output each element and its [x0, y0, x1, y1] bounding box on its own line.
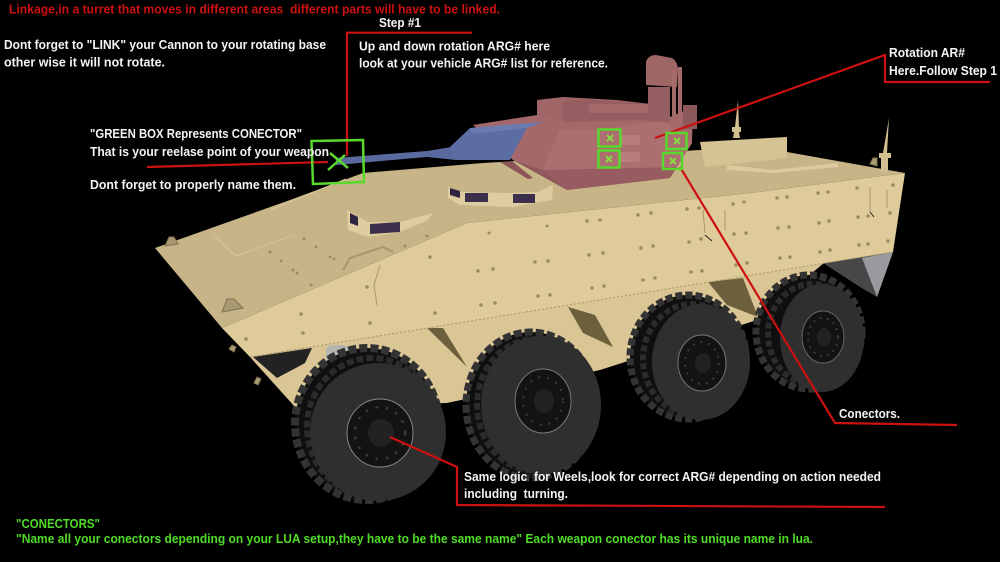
antennas — [732, 100, 891, 172]
rivets — [244, 183, 895, 341]
deck panel lines — [214, 179, 346, 256]
label: conectors: Conectors. — [839, 406, 900, 421]
cupola hatch two — [347, 210, 433, 237]
note: rotation arg — [889, 45, 997, 78]
side hatch lines — [374, 187, 887, 305]
second wheel — [466, 332, 601, 478]
footer note — [16, 516, 813, 546]
note: wheels — [464, 469, 881, 501]
hull handle — [343, 247, 393, 270]
cupola hatch one — [448, 185, 553, 207]
top deck — [155, 150, 905, 328]
vehicle illustration — [155, 55, 905, 501]
note: rotation arg: Rotation AR# — [889, 45, 966, 60]
lower hull — [250, 252, 893, 407]
hatch handles — [705, 212, 874, 241]
note: green box: That is your reelase point of your weapon — [90, 144, 329, 159]
lifting lugs — [165, 158, 877, 385]
cannon barrel — [336, 147, 456, 165]
note: up and down rotation — [359, 38, 608, 70]
green x markers — [606, 135, 680, 164]
footer note: "Name all your conectors depending on your LUA setup,they have to be the same name" Each weapon conector has its unique name in lua. — [16, 531, 813, 546]
side seam — [250, 252, 893, 357]
gun mantlet — [450, 122, 543, 160]
rear wheel — [756, 275, 864, 392]
note: wheels: Same logic for Weels,look for correct ARG# depending on action needed — [464, 469, 881, 484]
note: green box — [90, 126, 329, 192]
note: green box: Dont forget to properly name them. — [90, 177, 296, 192]
note: link cannon: other wise it will not rotate. — [4, 54, 165, 70]
third wheel — [630, 295, 750, 420]
hull side — [222, 173, 905, 357]
note: link cannon — [4, 37, 326, 70]
title: Linkage,in a turret that moves in different areas different parts will have to be linked. — [9, 2, 500, 16]
red leader lines — [147, 33, 990, 507]
note: up and down rotation: Up and down rotation ARG# here — [359, 38, 550, 54]
turret — [473, 55, 697, 190]
note: up and down rotation: look at your vehicle ARG# list for reference. — [359, 56, 608, 70]
turret strut — [500, 161, 533, 179]
rear deck box — [700, 137, 838, 173]
note: wheels: including turning. — [464, 486, 568, 501]
step label: Step #1 — [379, 15, 421, 30]
note: link cannon: Dont forget to "LINK" your Cannon to your rotating base — [4, 37, 326, 52]
front wheel — [295, 348, 446, 501]
note: green box: "GREEN BOX Represents CONECTOR" — [90, 126, 302, 141]
footer note: "CONECTORS" — [16, 516, 100, 531]
green connector boxes — [312, 130, 686, 184]
